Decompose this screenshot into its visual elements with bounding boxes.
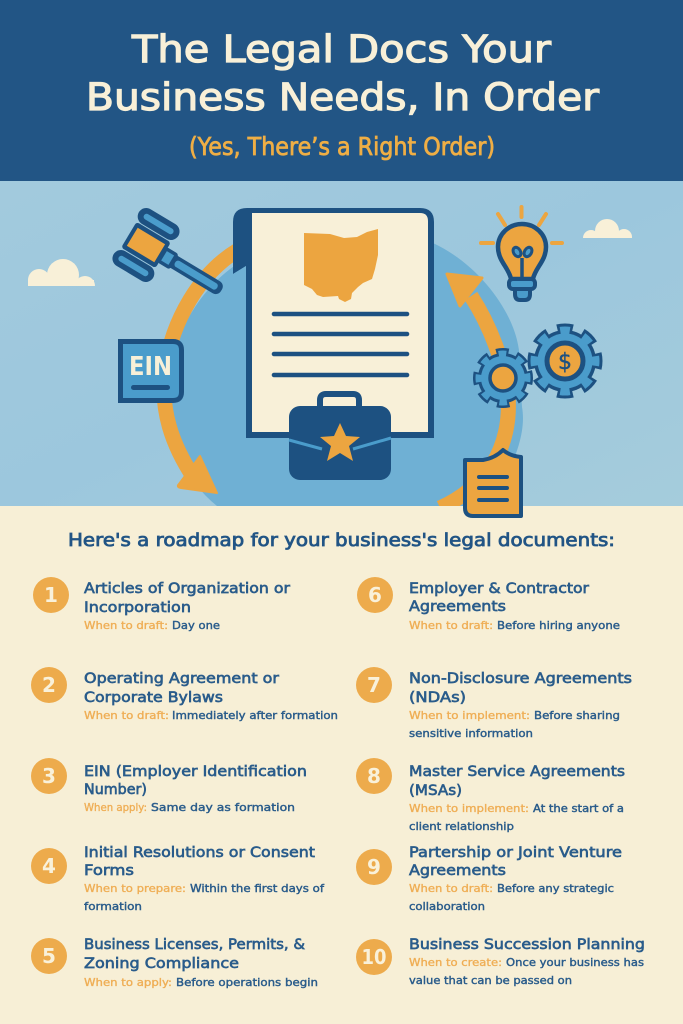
item 10: When to create:	[409, 957, 502, 969]
item 7: When to implement:	[409, 710, 530, 722]
item 3: 3	[42, 764, 56, 788]
item 3: Number)	[84, 781, 147, 798]
header banner	[0, 0, 683, 181]
item 8: (MSAs)	[409, 782, 462, 799]
item 7	[356, 667, 632, 740]
item 1: Day one	[172, 620, 220, 632]
item 10: Business Succession Planning	[409, 936, 645, 953]
illustration panel	[0, 181, 683, 508]
item 1: Incorporation	[84, 599, 191, 616]
item 6: 6	[368, 583, 382, 607]
icon: large gear with dollar	[534, 330, 596, 392]
blue disc backdrop	[167, 243, 523, 506]
item 7: sensitive information	[409, 728, 533, 740]
item 2: Operating Agreement or	[84, 670, 279, 687]
item 8: Master Service Agreements	[409, 763, 625, 780]
item 2: When to draft:	[84, 710, 169, 722]
item 7: Before sharing	[534, 710, 620, 722]
document	[233, 208, 434, 438]
item 7: 7	[367, 673, 381, 697]
item 10	[356, 936, 645, 987]
icon: clipboard note	[465, 450, 521, 516]
item 6: When to draft:	[409, 620, 493, 632]
item 8: At the start of a	[533, 803, 624, 815]
cream content panel	[0, 506, 683, 1024]
item 5: Before operations begin	[176, 977, 318, 989]
item 4: 4	[42, 854, 56, 878]
item 9: Before any strategic	[497, 883, 614, 895]
item 5	[31, 936, 318, 989]
title	[86, 28, 600, 119]
subtitle: (Yes, There’s a Right Order)	[189, 132, 495, 161]
item 7: (NDAs)	[409, 689, 466, 706]
icon: small gear	[478, 353, 528, 403]
item 8: When to implement:	[409, 803, 529, 815]
icon: cloud left	[28, 259, 95, 286]
item 5: When to apply:	[84, 977, 172, 989]
item 8	[356, 758, 625, 833]
icon: lightbulb	[481, 207, 562, 300]
item 6: Before hiring anyone	[497, 620, 620, 632]
item 9	[356, 844, 622, 913]
item 5: Business Licenses, Permits, &	[84, 936, 305, 953]
title: The Legal Docs Your	[131, 28, 552, 71]
item 1: Articles of Organization or	[84, 580, 290, 597]
arrow: right arc	[440, 274, 508, 508]
item 2: Immediately after formation	[172, 710, 338, 722]
item 3: When apply:	[84, 802, 147, 814]
icon: gavel	[109, 205, 238, 319]
roadmap heading: Here's a roadmap for your business's legal documents:	[68, 531, 615, 551]
item 6: Employer & Contractor	[409, 580, 589, 597]
item 1: When to draft:	[84, 620, 168, 632]
item 5: Zoning Compliance	[84, 955, 239, 972]
item 4: Initial Resolutions or Consent	[84, 844, 315, 861]
item 9: 9	[367, 855, 381, 879]
item 4: Within the first days of	[190, 883, 324, 895]
item 3: EIN (Employer Identification	[84, 763, 307, 780]
item 9: Partership or Joint Venture	[409, 844, 622, 861]
item 8: client relationship	[409, 821, 514, 833]
icon: briefcase	[289, 394, 391, 480]
icon: cloud right	[583, 219, 632, 238]
item 5: 5	[42, 944, 56, 968]
item 3	[31, 758, 307, 814]
item 10: 10	[362, 945, 386, 969]
item 2	[31, 667, 338, 722]
item 4: When to prepare:	[84, 883, 186, 895]
item 3: Same day as formation	[151, 802, 295, 814]
item 10: value that can be passed on	[409, 975, 572, 987]
item 4: Forms	[84, 862, 134, 879]
icon: large gear with dollar: $	[558, 350, 572, 375]
item 1	[33, 577, 290, 632]
item 4: formation	[84, 901, 142, 913]
arrow: left arc	[164, 250, 238, 493]
icon: Ohio state shape	[304, 229, 378, 302]
item 9: Agreements	[409, 862, 506, 879]
item 7: Non-Disclosure Agreements	[409, 670, 632, 687]
icon: EIN badge	[120, 342, 182, 400]
item 9: collaboration	[409, 901, 485, 913]
item 4	[31, 844, 324, 913]
icon: EIN badge: EIN	[129, 352, 172, 382]
item 6	[357, 577, 620, 632]
title: Business Needs, In Order	[86, 76, 600, 119]
item 10: Once your business has	[506, 957, 644, 969]
item 1: 1	[44, 583, 58, 607]
item 2: Corporate Bylaws	[84, 689, 223, 706]
item 8: 8	[367, 764, 381, 788]
document text lines	[274, 314, 407, 375]
item 6: Agreements	[409, 598, 506, 615]
item 2: 2	[42, 673, 56, 697]
item 9: When to draft:	[409, 883, 493, 895]
